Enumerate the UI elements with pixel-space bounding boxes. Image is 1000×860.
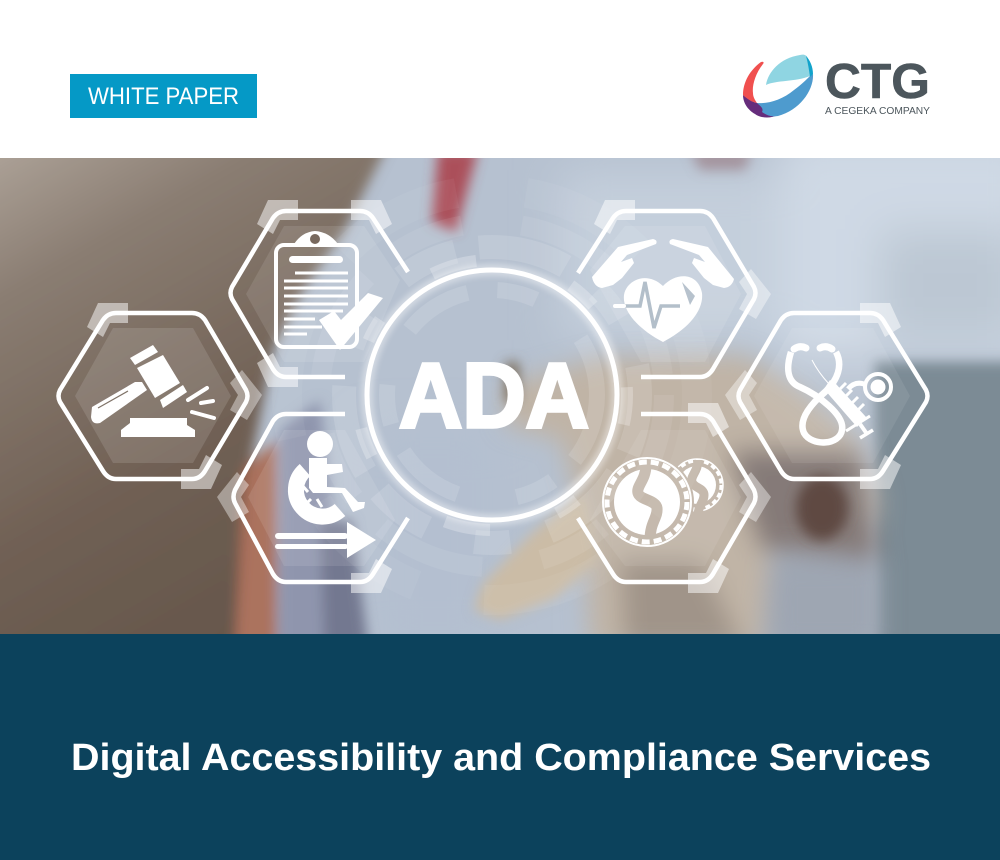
- heart cutout: [682, 282, 695, 305]
- hexagon: healthcare heart: [578, 200, 771, 377]
- circle glow: [367, 270, 617, 520]
- inner hexagon: [754, 328, 910, 463]
- icon: clipboard with check: [276, 231, 383, 350]
- clipboard lines: [284, 256, 348, 334]
- clipboard frame: [276, 245, 357, 347]
- hexagon outline: [578, 414, 756, 582]
- corner accents: [594, 200, 771, 319]
- corner accents: [87, 303, 262, 489]
- title band: [0, 634, 1000, 860]
- front coin: [603, 458, 691, 546]
- logo tagline: A CEGEKA COMPANY: [825, 105, 930, 117]
- right hand: [669, 239, 734, 288]
- hexagon: compliance clipboard: [230, 200, 408, 387]
- corner accents: [257, 200, 392, 387]
- hexagon outline: [738, 313, 928, 479]
- hero photo background: [0, 158, 1000, 634]
- inner hexagon: [75, 328, 231, 463]
- radial tech rings: [332, 216, 652, 555]
- check mark: [319, 293, 383, 350]
- icon: coins: [603, 458, 723, 546]
- hexagon: wheelchair accessibility: [217, 414, 408, 593]
- arrow: [275, 522, 376, 558]
- CTG logo: [743, 55, 930, 118]
- icon: hands and heart: [592, 239, 734, 342]
- back coin: [671, 459, 723, 511]
- head: [307, 431, 333, 457]
- white paper badge: [70, 74, 257, 118]
- corner accents: [725, 303, 901, 489]
- left hand: [592, 239, 657, 288]
- inner hexagon: [590, 226, 741, 362]
- icon: wheelchair: [275, 431, 376, 558]
- ADA central circle: [367, 270, 617, 520]
- hexagon: stethoscope and syringe: [725, 303, 928, 489]
- inner hexagon: [248, 430, 395, 566]
- ear tips: [794, 347, 832, 349]
- hexagon outline: [578, 211, 756, 377]
- corner accents: [688, 403, 771, 593]
- white paper badge: WHITE PAPER: [88, 83, 239, 110]
- wheel: [296, 470, 340, 517]
- title: Digital Accessibility and Compliance Services: [71, 737, 931, 779]
- logo wordmark: CTG: [825, 55, 930, 109]
- heart: [624, 276, 702, 342]
- ADA label: ADA: [399, 345, 589, 447]
- tubing: [788, 352, 842, 442]
- logo swoosh: [743, 55, 813, 118]
- inner hexagon: [246, 226, 400, 362]
- circle ring: [367, 270, 617, 520]
- clipboard clip: [294, 231, 338, 244]
- wheel spokes: [301, 484, 322, 507]
- ECG trace: [624, 282, 680, 328]
- corner accents: [217, 472, 392, 593]
- hexagon outline: [230, 211, 408, 377]
- hexagon: legal gavel: [58, 303, 262, 489]
- hexagon: finance coins: [578, 403, 771, 593]
- inner hexagon: [590, 430, 741, 566]
- hexagon outline: [58, 313, 248, 479]
- icon: stethoscope: [788, 347, 891, 442]
- hexagon outline: [234, 414, 408, 582]
- icon: gavel: [91, 345, 214, 437]
- ECG pill: [613, 304, 626, 308]
- body: [309, 458, 365, 512]
- icon: syringe: [812, 360, 873, 438]
- chest piece: [865, 374, 891, 400]
